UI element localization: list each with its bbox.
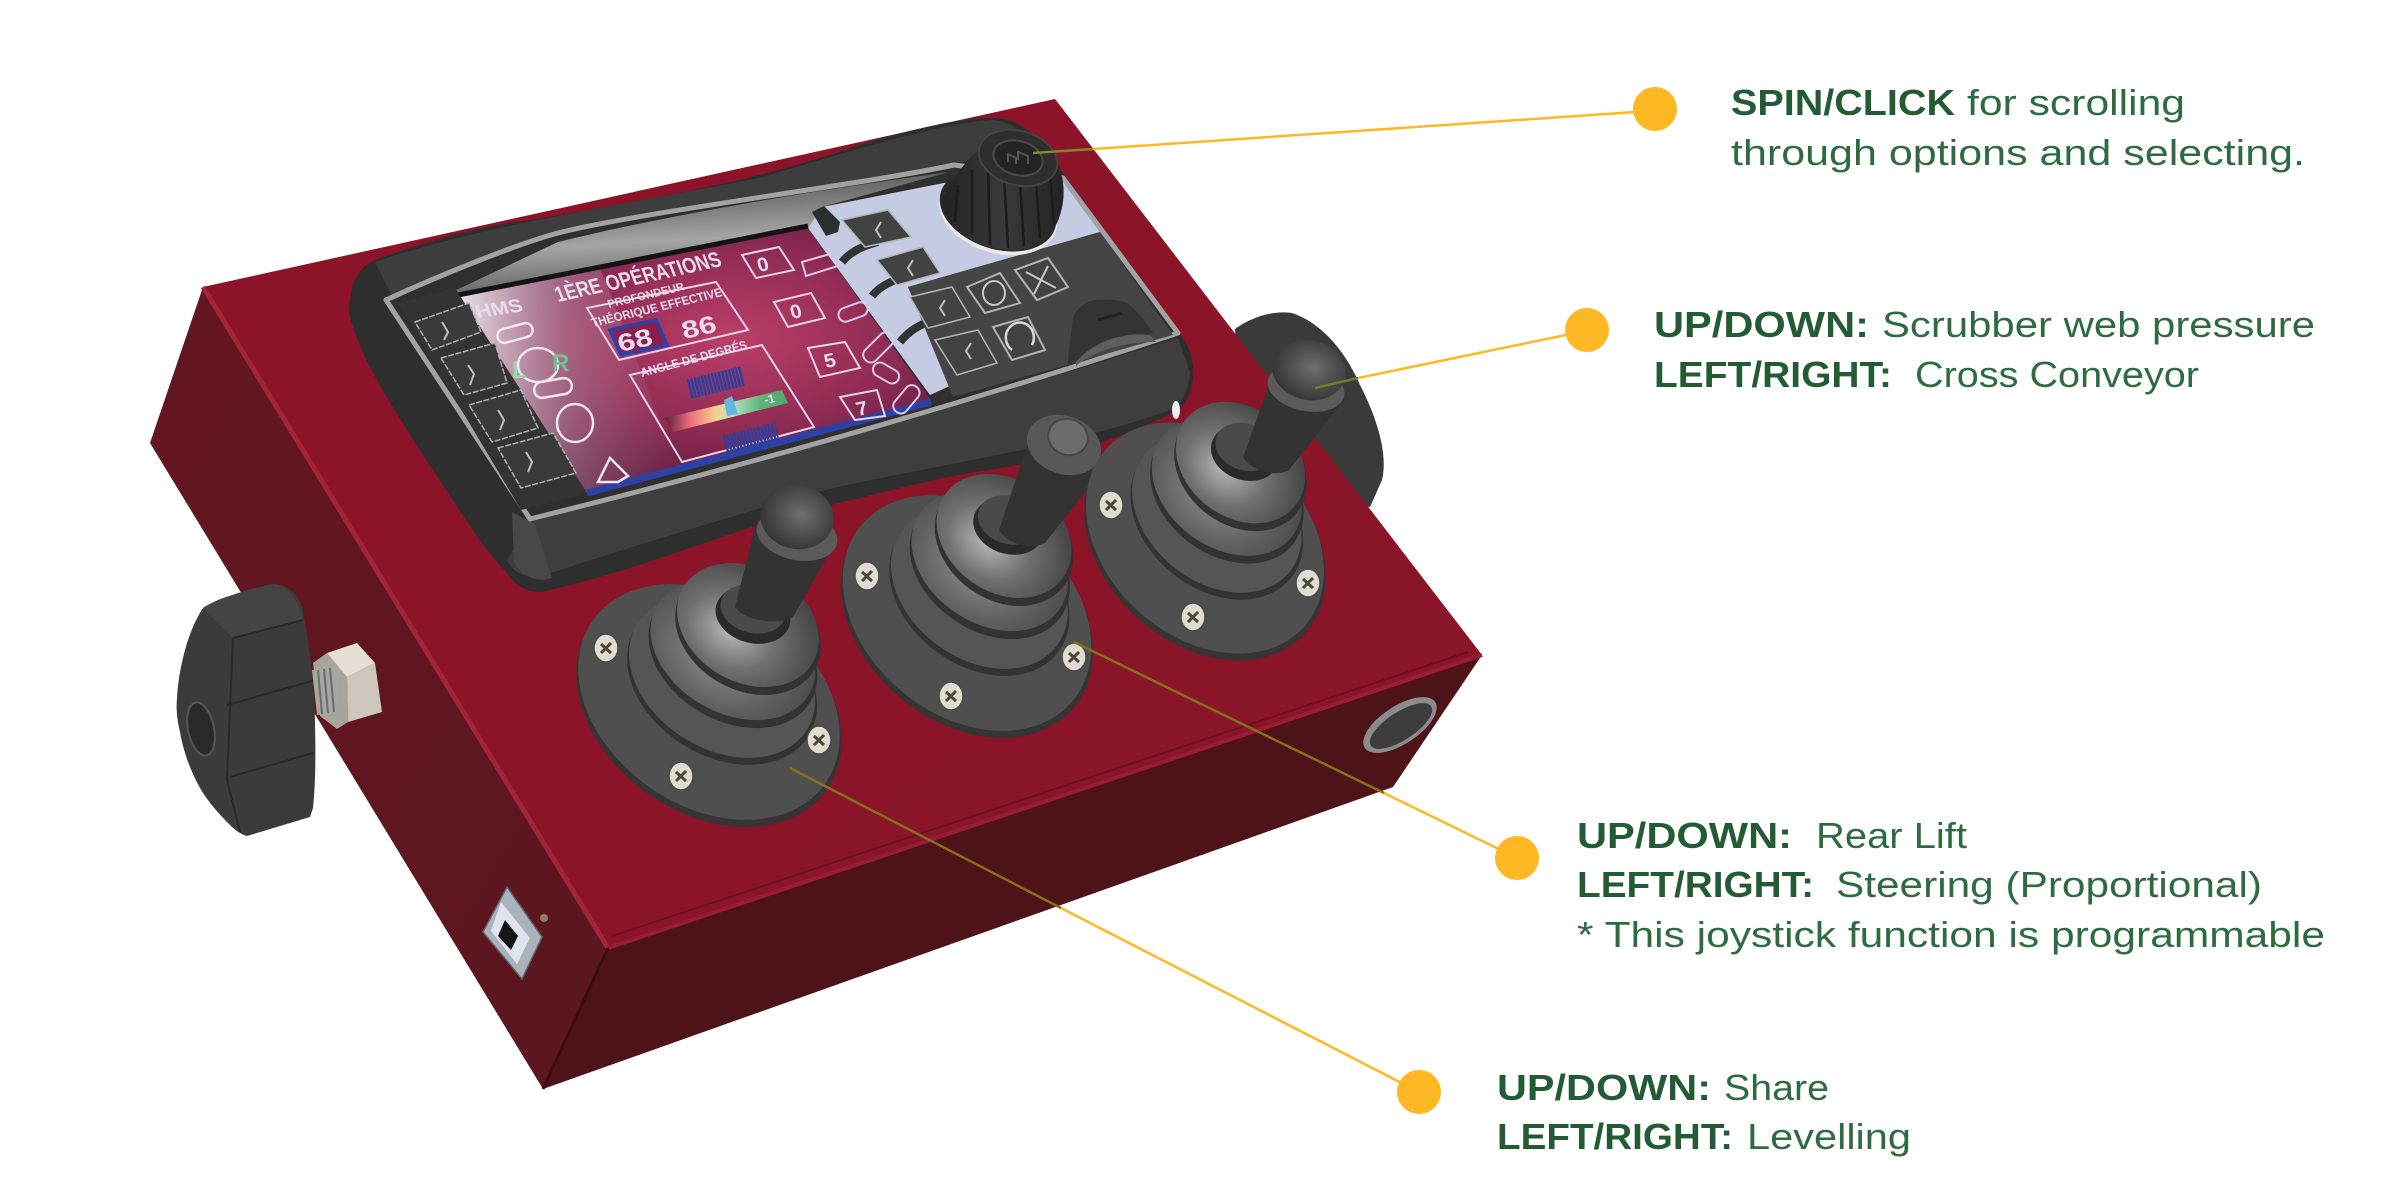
depth box: 86 (679, 311, 720, 345)
right side status icons (802, 254, 922, 416)
leader line: right joystick (1315, 331, 1585, 388)
L and R indicators (512, 350, 569, 384)
angle box: ANGLE DE DEGRÉS (638, 337, 749, 380)
value boxes: 7 (854, 398, 870, 421)
front face (543, 655, 1482, 1089)
callout dot 3 (1495, 836, 1539, 880)
HMS label: HMS (473, 295, 526, 323)
panel: control box enclosure (150, 99, 1482, 1089)
rotary knob (927, 122, 1069, 270)
joystick mounting screws (594, 491, 1320, 790)
angle box (630, 337, 814, 462)
callout text: rear lift and steering: * This joystick function is programmable (1577, 914, 2325, 955)
console corner highlight (512, 512, 552, 580)
knob hole (183, 700, 219, 758)
right button column (842, 210, 997, 375)
callout text: spin click (1731, 82, 2305, 173)
knob cap (972, 122, 1064, 194)
depth box: 68 (615, 324, 656, 358)
callout text: rear lift and steering: UP/DOWN: (1577, 815, 1792, 856)
depth box (587, 280, 748, 360)
hex nut (327, 643, 375, 677)
value boxes (742, 247, 885, 421)
depth box: PROFONDEUR (606, 280, 686, 311)
left side status icons (496, 322, 628, 482)
callout text: share and levelling (1497, 1067, 1911, 1157)
leader line: middle joystick (1074, 642, 1517, 858)
bolt thread (312, 667, 340, 715)
console lower face (507, 338, 1190, 576)
value boxes: 0 (788, 301, 804, 324)
knob base ring (927, 154, 1069, 270)
callout text: share and levelling: LEFT/RIGHT: (1497, 1116, 1733, 1157)
screen blue lower edge (587, 402, 931, 493)
knob body (177, 584, 315, 836)
L and R indicators: R (552, 350, 569, 377)
right side clamp knob (1235, 312, 1384, 507)
screen title: 1ÈRE OPÉRATIONS (551, 247, 725, 307)
console housing (349, 118, 1193, 592)
callout text: spin click: SPIN/CLICK (1731, 82, 1955, 123)
left side face (150, 287, 608, 1089)
glass upper area (452, 172, 949, 297)
bezel rim (386, 165, 1178, 519)
joystick 1 (530, 478, 888, 876)
callout text: scrubber and conveyor: UP/DOWN: (1654, 304, 1869, 345)
depth box: THÉORIQUE EFFECTIVE (589, 285, 724, 330)
USB cover (1067, 300, 1156, 367)
callout text: rear lift and steering (1577, 815, 2325, 955)
round connector (1354, 686, 1446, 764)
callout text: share and levelling: Share (1724, 1067, 1829, 1108)
callout dot 2 (1565, 308, 1609, 352)
callout text: spin click: through options and selecting. (1731, 132, 2305, 173)
lower right dark panel (908, 232, 1173, 397)
callout text: rear lift and steering: Rear Lift (1816, 815, 1967, 856)
lavender control panel (808, 182, 1100, 395)
knob top facet (203, 584, 303, 638)
joystick 3 (1042, 333, 1368, 709)
console upper face highlight (375, 120, 1030, 296)
callout dot 1 (1633, 87, 1677, 131)
callout text: share and levelling: UP/DOWN: (1497, 1067, 1711, 1108)
leader line: rotary knob (1033, 111, 1650, 153)
L and R indicators: L (512, 357, 527, 384)
leader line: left joystick (790, 768, 1419, 1092)
value boxes: 0 (755, 254, 771, 277)
left button column (398, 288, 587, 510)
knob body (943, 140, 1064, 250)
top face (203, 99, 1482, 948)
network port on side (483, 887, 548, 979)
display screen (458, 226, 931, 493)
callout text: scrubber and conveyor: Scrubber web pressure (1882, 304, 2315, 345)
callout text: rear lift and steering: LEFT/RIGHT: (1577, 864, 1814, 905)
callout text: scrubber and conveyor: LEFT/RIGHT: (1654, 354, 1892, 395)
left clamp knob with bolt (177, 584, 382, 836)
value boxes: 5 (822, 350, 838, 373)
angle box: -1 (762, 391, 777, 407)
function buttons (967, 258, 1068, 360)
callout text: scrubber and conveyor: Cross Conveyor (1915, 354, 2199, 395)
callout text: rear lift and steering: Steering (Proportional) (1836, 864, 2262, 905)
callout dot 4 (1397, 1070, 1441, 1114)
panel: display console (349, 118, 1193, 592)
joystick 2 (797, 405, 1137, 787)
callout text: spin click: for scrolling (1967, 82, 2185, 123)
white indicator (1172, 401, 1180, 419)
callout text: share and levelling: Levelling (1747, 1116, 1911, 1157)
washer (313, 653, 348, 729)
callout text: scrubber and conveyor (1654, 304, 2315, 395)
